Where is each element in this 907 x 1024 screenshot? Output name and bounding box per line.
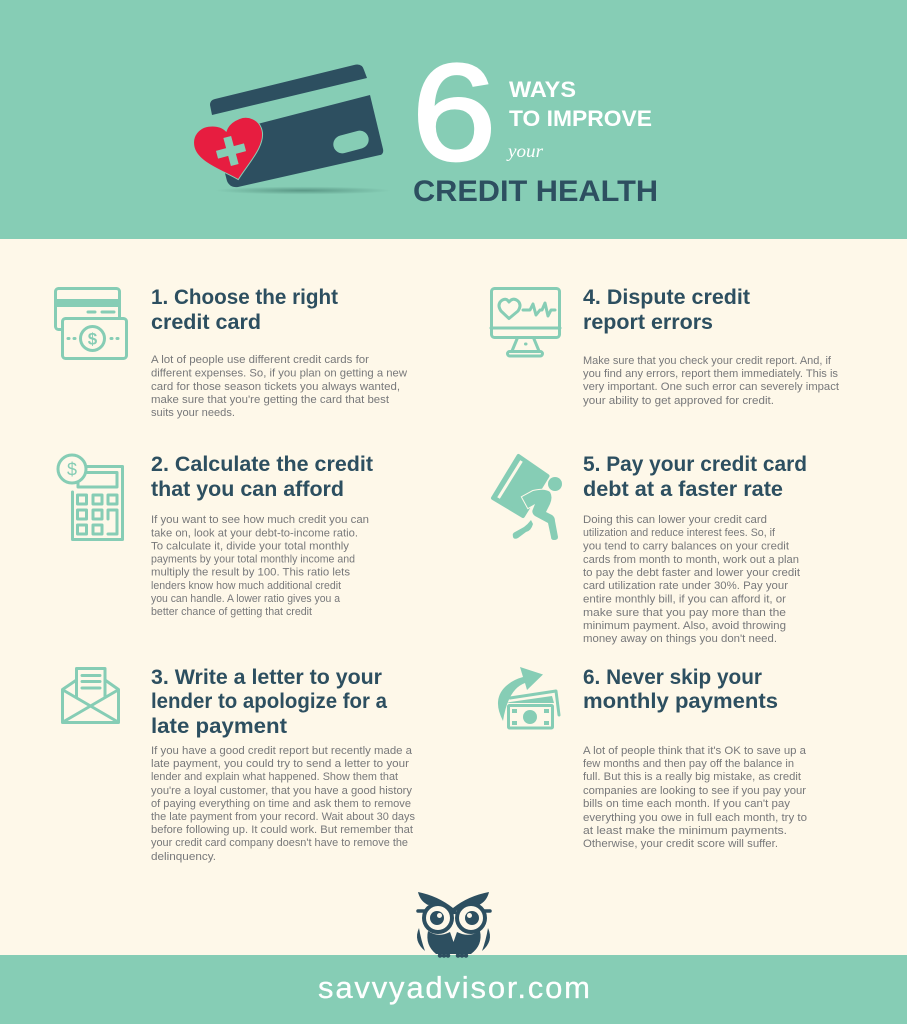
text block: very important. One such error can severely impact [583, 381, 839, 393]
icon: calculator and coin: $ [67, 460, 77, 480]
panel: tip 1 [55, 286, 407, 419]
panel: tip 5 [493, 453, 807, 645]
icon: credit card and banknote: $ [88, 330, 98, 348]
text block: entire monthly bill, if you can afford it, or [583, 594, 786, 606]
title: 6 ways to improve your credit health [412, 36, 658, 208]
text block [151, 745, 416, 863]
heading: 3. Write a letter to your [151, 666, 382, 689]
icon: person carrying credit card [493, 456, 562, 540]
text block: you're a loyal customer, that you have a good history [151, 785, 413, 797]
icon: envelope with letter [62, 668, 118, 722]
text block: you find any errors, report them immediately. This is [583, 368, 839, 380]
heading [151, 666, 387, 738]
icon: monitor with heartbeat [491, 288, 560, 356]
text block: Doing this can lower your credit card [583, 514, 767, 526]
text block: take on, look at your debt-to-income ratio. [151, 528, 358, 540]
title: 6 ways to improve your credit health: 6 [412, 36, 496, 190]
text block: different expenses. So, if you plan on getting a new [151, 368, 407, 380]
text block: card for those season tickets you always wanted, [151, 381, 400, 393]
text block: make sure that you're getting the card that best [151, 394, 389, 406]
text block: A lot of people think that it's OK to save up a [583, 745, 806, 757]
footer url: savvyadvisor.com [318, 970, 590, 1005]
heading: credit card [151, 311, 261, 334]
text block: utilization and reduce interest fees. So, if [583, 527, 776, 539]
text block [151, 514, 369, 618]
text block: you tend to carry balances on your credit [583, 540, 789, 552]
heading: 2. Calculate the credit [151, 453, 373, 476]
icon: owl with glasses [417, 892, 490, 956]
heading [151, 286, 338, 334]
text block: before following up. It could work. But remember that [151, 824, 413, 836]
text block: your credit card company doesn't have to remove the [151, 837, 408, 849]
text block: your ability to get approved for credit. [583, 395, 774, 407]
heading: lender to apologize for a [151, 690, 387, 713]
text block [583, 355, 839, 407]
panel: tip 2 [58, 453, 373, 618]
text block: multiply the result by 100. This ratio lets [151, 566, 351, 578]
text block: delinquency. [151, 851, 216, 863]
text block: late payment, you could try to send a letter to your [151, 758, 409, 770]
text block [583, 745, 807, 850]
text block: everything you owe in full each month, try to [583, 812, 807, 824]
text block: card utilization rate under 30%. Pay your [583, 580, 788, 592]
text block: lenders know how much additional credit [151, 580, 341, 592]
title: 6 ways to improve your credit health: WAYS [509, 77, 576, 102]
footer band [0, 955, 907, 1024]
text block: make sure that you pay more than the [583, 607, 786, 619]
text block: of paying everything on time and ask them to remove [151, 798, 411, 810]
text block: full. But this is a really big mistake, as credit [583, 771, 801, 783]
text block: cards from month to month, work out a plan [583, 554, 799, 566]
heading [583, 666, 778, 713]
heading: monthly payments [583, 690, 778, 713]
text block [151, 354, 407, 419]
panel: tip 4 [491, 286, 839, 407]
title: 6 ways to improve your credit health: your [506, 141, 544, 161]
text block: If you have a good credit report but recently made a [151, 745, 412, 757]
text block: A lot of people use different credit cards for [151, 354, 369, 366]
heading [583, 286, 750, 334]
icon: credit card with heart [190, 65, 391, 194]
text block: suits your needs. [151, 407, 235, 419]
heading: 4. Dispute credit [583, 286, 750, 309]
heading [583, 453, 807, 501]
text block: Make sure that you check your credit report. And, if [583, 355, 832, 367]
icon: banknotes with arrow [498, 667, 559, 728]
icon: calculator and coin [58, 455, 122, 540]
panel: tip 6 [498, 666, 807, 850]
text block: bills on time each month. If you can't pay [583, 798, 791, 810]
icon: credit card and banknote [55, 288, 126, 358]
text block: Otherwise, your credit score will suffer. [583, 838, 778, 850]
text block: to pay the debt faster and lower your credit [583, 567, 800, 579]
heading: 6. Never skip your [583, 666, 762, 689]
heading: that you can afford [151, 478, 344, 501]
heading: report errors [583, 311, 713, 334]
text block: you can handle. A lower ratio gives you a [151, 593, 340, 605]
text block [583, 514, 800, 645]
text block: payments by your total monthly income and [151, 554, 355, 566]
title: 6 ways to improve your credit health: CREDIT HEALTH [413, 175, 658, 208]
text block: money away on things you don't need. [583, 633, 777, 645]
text block: the late payment from your record. Wait about 30 days [151, 811, 416, 823]
heading: 5. Pay your credit card [583, 453, 807, 476]
text block: lender and explain what happened. Show them that [151, 771, 398, 783]
heading: 1. Choose the right [151, 286, 338, 309]
heading: debt at a faster rate [583, 478, 783, 501]
heading: late payment [151, 715, 287, 738]
heading [151, 453, 373, 501]
text block: If you want to see how much credit you can [151, 514, 369, 526]
text block: better chance of getting that credit [151, 606, 312, 618]
text block: minimum payment. Also, avoid throwing [583, 620, 786, 632]
title: 6 ways to improve your credit health: TO IMPROVE [509, 106, 652, 131]
header band [0, 0, 907, 239]
text block: at least make the minimum payments. [583, 825, 787, 837]
panel: tip 3 [62, 666, 416, 863]
text block: To calculate it, divide your total monthly [151, 540, 350, 552]
text block: few months and then pay off the balance in [583, 758, 794, 770]
text block: companies are looking to see if you pay your [583, 785, 806, 797]
